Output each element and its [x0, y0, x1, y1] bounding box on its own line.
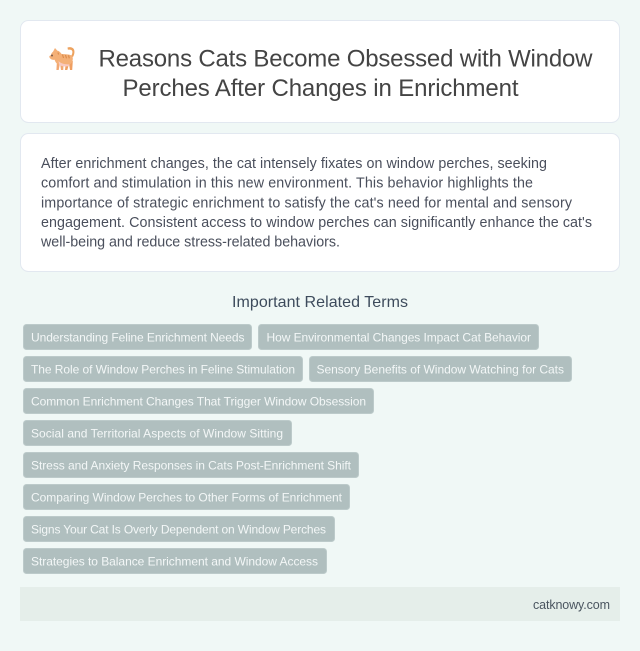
tag 1: [24, 324, 252, 350]
summary line 5: well-being and reduce stress-related behaviors.: [40, 234, 340, 250]
tag 8: Comparing Window Perches to Other Forms of Enrichment: [31, 490, 343, 504]
tag 5: Common Enrichment Changes That Trigger Window Obsession: [31, 394, 366, 408]
icon: cat: [49, 47, 74, 70]
tag 1: Understanding Feline Enrichment Needs: [31, 330, 244, 344]
summary line 4: engagement. Consistent access to window perches can significantly enhance the cat's: [41, 215, 592, 231]
tag 4: Sensory Benefits of Window Watching for Cats: [316, 362, 564, 376]
tag 9: Signs Your Cat Is Overly Dependent on Window Perches: [31, 522, 326, 536]
tag 7: Stress and Anxiety Responses in Cats Post-Enrichment Shift: [31, 458, 352, 472]
footer source: catknowy.com: [533, 598, 610, 612]
tag 4: [310, 356, 572, 382]
footer: [20, 587, 620, 621]
tag 7: [24, 452, 358, 478]
summary line 2: comfort and stimulation in this new environment. This behavior highlights the: [41, 176, 533, 192]
tag 6: Social and Territorial Aspects of Window Sitting: [31, 426, 283, 440]
summary line 3: importance of strategic enrichment to satisfy the cat's need for mental and sensory: [41, 196, 573, 212]
tag 10: [24, 548, 326, 574]
tag 5: [24, 388, 374, 414]
tag 2: [258, 324, 538, 350]
summary line 1: After enrichment changes, the cat intensely fixates on window perches, seeking: [41, 156, 547, 172]
tag 3: The Role of Window Perches in Feline Stimulation: [31, 362, 295, 376]
tag 9: [24, 516, 334, 542]
tag group: related terms: [24, 324, 572, 574]
tag 8: [24, 484, 350, 510]
tag 10: Strategies to Balance Enrichment and Window Access: [31, 554, 318, 568]
panel: title card: [20, 20, 620, 122]
title line 1: Reasons Cats Become Obsessed with Window: [98, 46, 593, 73]
panel: summary: [20, 134, 620, 272]
tag 2: How Environmental Changes Impact Cat Behavior: [266, 330, 531, 344]
title line 2: Perches After Changes in Enrichment: [122, 75, 519, 102]
tag 6: [24, 420, 292, 446]
tag 3: [24, 356, 302, 382]
heading: related terms: Important Related Terms: [232, 294, 408, 311]
